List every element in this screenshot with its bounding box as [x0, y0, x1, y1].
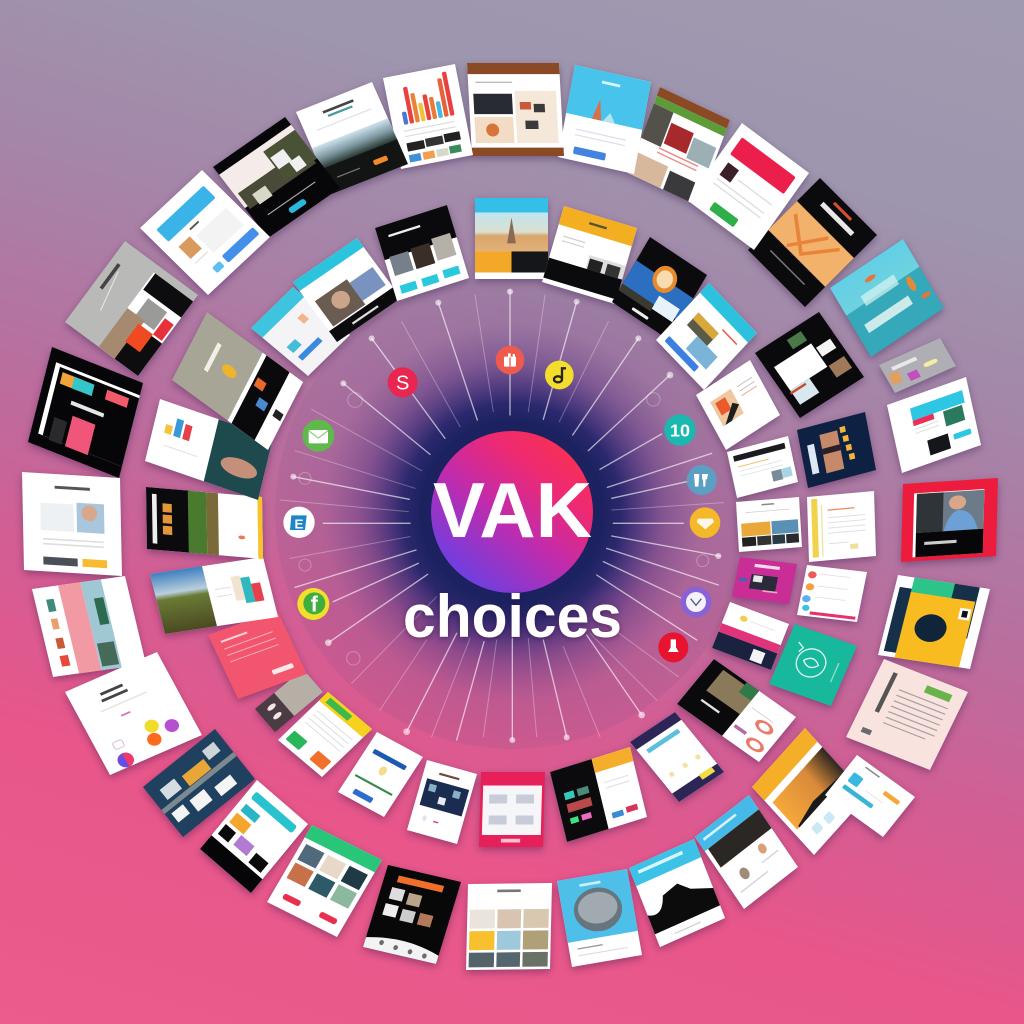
card: green template with photos: [267, 825, 382, 937]
card: white template with portrait photo: [293, 238, 401, 342]
card: cyan template with silhouettes: [629, 839, 725, 947]
card: white template with portrait: [22, 472, 122, 576]
card: small dark grey template: [255, 669, 323, 732]
card: white template with colour circles: [65, 652, 202, 775]
card: black and blue template with coffee: [612, 237, 707, 340]
card: navy template with tiles: [143, 729, 255, 837]
card: white small list template: [797, 565, 867, 622]
icon: purple clock: [681, 587, 711, 617]
card: brown and green template with photos: [628, 87, 730, 206]
card: brown template: [467, 63, 564, 156]
card: bar chart template: [383, 64, 473, 169]
card: black template with orange map: [748, 178, 877, 307]
card: beach template: [475, 198, 548, 279]
card: black template with collage: [213, 117, 340, 238]
central gradient disc: [431, 431, 593, 593]
icon: yellow and green f: [297, 588, 329, 620]
icon: white circle with blue E: E: [295, 517, 304, 532]
card: white template with orange image: [696, 360, 780, 450]
icon: red S: [388, 367, 418, 397]
card: black strip with forest: [146, 487, 263, 559]
card: white template with dark image: [695, 795, 798, 909]
card: template with black background: [28, 347, 143, 478]
icon: yellow music note: [545, 361, 574, 389]
icon: amber gem: [690, 507, 720, 538]
card: navy template with faces: [797, 412, 876, 488]
card: white template with blue bars: [338, 732, 423, 817]
card: black template with portraits: [375, 205, 469, 301]
icon: teal number 10: [664, 414, 696, 446]
card: blue template with globe: [557, 869, 642, 967]
floating icons: [283, 346, 720, 662]
card: navy and yellow poster: [878, 575, 990, 669]
card: white template with navy panel: [407, 760, 477, 844]
icon: green envelope: [302, 420, 334, 452]
card: teal emblem template: [769, 624, 857, 706]
card: sunset template with orange band: [752, 728, 867, 855]
card: khaki template: [172, 312, 303, 450]
central dark halo disc: [275, 275, 749, 749]
icon: steel blue shirts: [687, 465, 717, 495]
card: white template with pink column: [32, 576, 146, 677]
card: navy edged white template: [630, 712, 724, 802]
icon: teal number 10: 10: [670, 421, 690, 441]
card: chart and photo template: [145, 399, 273, 500]
icon: yellow and green f: f: [311, 591, 319, 616]
icon: red bell: [658, 632, 688, 662]
card: red framed template: [479, 772, 545, 847]
card: coral template: [208, 610, 307, 699]
card: city skyline template: [296, 82, 408, 194]
card: black and white photo template: [677, 659, 796, 762]
card: cyan template with button: [558, 65, 651, 174]
card: white template with photo row: [736, 497, 802, 552]
card: yellow corner template: [278, 692, 372, 777]
icon: red S: S: [396, 372, 409, 394]
card: ocean poster: [830, 239, 944, 357]
title: VAK: VAK: [433, 466, 592, 554]
card: white template with cyan band: [656, 283, 757, 390]
subtitle: choices: choices: [403, 583, 622, 650]
card: black and white template with cyan banner: [200, 780, 308, 893]
card: pale pink document: [846, 659, 968, 770]
card: black template with white panel: [755, 312, 864, 418]
card: white template with cyan banner: [887, 377, 981, 473]
card: black template with orange banner: [363, 865, 461, 964]
icon: orange gift: [496, 346, 524, 374]
card: template with grey collage: [65, 241, 198, 376]
card: blue gradient template: [251, 287, 350, 376]
icon: white circle with blue E: [283, 507, 315, 538]
card: white template with red banner: [687, 123, 809, 250]
radial rays: [280, 289, 723, 743]
card: small grey banner: [879, 338, 956, 393]
card: magenta template: [732, 557, 797, 604]
card: white template with blue banner: [140, 170, 270, 295]
inner ring of email templates: [145, 198, 876, 847]
card: red poster with man: [901, 478, 998, 562]
card: black panel with orange white side: [550, 747, 647, 842]
card: landscape template: [150, 557, 278, 634]
card: orange header with black panel: [542, 206, 637, 304]
card: white template with yellow strip: [807, 491, 876, 562]
card: white template with image grid: [466, 883, 552, 970]
card: white pink navy template: [712, 602, 789, 670]
card: white small template: [727, 436, 798, 498]
card: small white template with blue buttons: [825, 755, 915, 837]
